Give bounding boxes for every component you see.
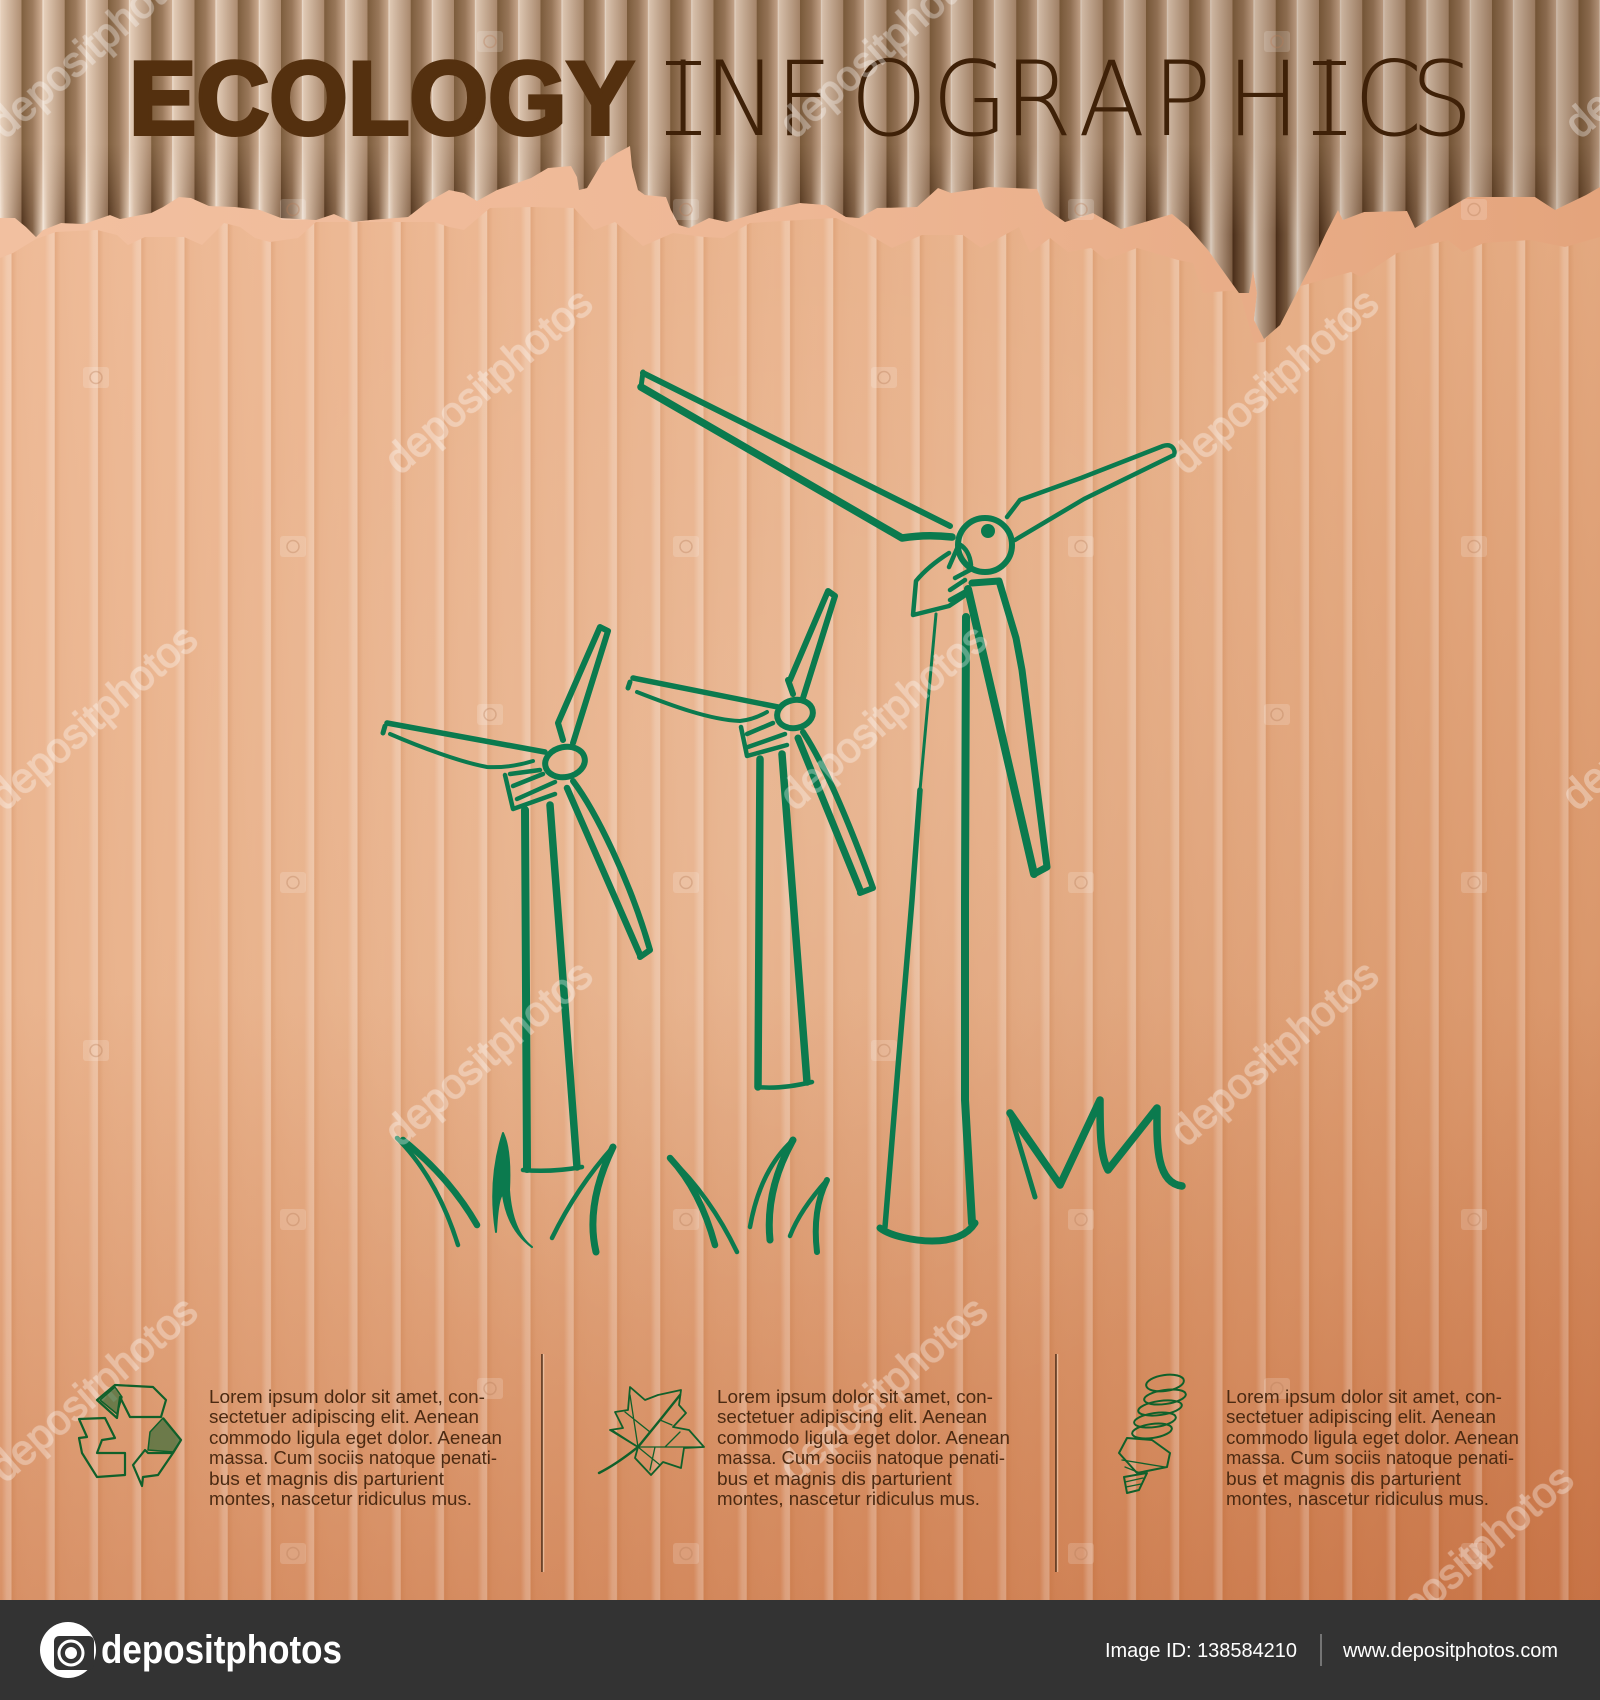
text block: column 1: Lorem ipsum dolor sit amet, con-: [209, 1386, 485, 1407]
exposed corrugated strip: [0, 0, 1600, 345]
text block: column 2: commodo ligula eget dolor. Aenean: [717, 1427, 1010, 1448]
watermark text: depositphotos: [1161, 278, 1387, 483]
image id: Image ID: 138584210: [1105, 1640, 1297, 1662]
logo wordmark: depositphotos: [101, 1628, 342, 1672]
torn paper flap: [0, 0, 1600, 343]
wind turbines illustration: [383, 372, 1182, 1252]
text block: column 1: [209, 1386, 502, 1509]
text block: column 2: sectetuer adipiscing elit. Aenean: [717, 1406, 987, 1427]
watermark text: depositphotos: [770, 1286, 996, 1491]
text block: column 3: bus et magnis dis parturient: [1226, 1468, 1461, 1489]
watermark text: depositphotos: [375, 950, 601, 1155]
text block: column 1: bus et magnis dis parturient: [209, 1468, 444, 1489]
footer separator: [1320, 1634, 1322, 1666]
column divider: [1056, 1354, 1058, 1572]
logo icon: camera: [40, 1622, 96, 1678]
middle turbine: [628, 591, 873, 1088]
footer bar: [0, 1600, 1600, 1700]
icon: maple leaf: [599, 1387, 704, 1475]
text block: column 1: massa. Cum sociis natoque penati-: [209, 1447, 497, 1468]
text block: column 2: bus et magnis dis parturient: [717, 1468, 952, 1489]
text block: column 3: [1226, 1386, 1519, 1509]
text block: column 1: commodo ligula eget dolor. Aenean: [209, 1427, 502, 1448]
text block: column 1: montes, nascetur ridiculus mus.: [209, 1488, 472, 1509]
large turbine: [641, 372, 1175, 1241]
text block: column 1: sectetuer adipiscing elit. Aenean: [209, 1406, 479, 1427]
grass tufts: [397, 1100, 1182, 1252]
watermark text: depositphotos: [1356, 1454, 1582, 1659]
watermark text: depositphotos: [375, 278, 601, 483]
text block: column 2: [717, 1386, 1010, 1509]
column divider: [542, 1354, 544, 1572]
text block: column 3: commodo ligula eget dolor. Aenean: [1226, 1427, 1519, 1448]
small camera watermarks: [83, 31, 1487, 1564]
text block: column 3: sectetuer adipiscing elit. Aenean: [1226, 1406, 1496, 1427]
text block: column 3: massa. Cum sociis natoque penati-: [1226, 1447, 1514, 1468]
text block: column 2: Lorem ipsum dolor sit amet, con-: [717, 1386, 993, 1407]
watermark text: depositphotos: [770, 614, 996, 819]
watermark text: depositphotos: [1161, 950, 1387, 1155]
text block: column 3: montes, nascetur ridiculus mus.: [1226, 1488, 1489, 1509]
icon: recycle: [79, 1385, 181, 1486]
title word: ecology: ECOLOGY: [129, 41, 634, 157]
left turbine: [383, 627, 650, 1171]
website: www.depositphotos.com: [1342, 1640, 1558, 1662]
title: [129, 40, 1473, 160]
text block: column 2: montes, nascetur ridiculus mus.: [717, 1488, 980, 1509]
title word: infographics: INFOGRAPHICS: [669, 40, 1473, 160]
text block: column 3: Lorem ipsum dolor sit amet, con-: [1226, 1386, 1502, 1407]
icon: light bulb: [1119, 1372, 1187, 1493]
text block: column 2: massa. Cum sociis natoque penati-: [717, 1447, 1005, 1468]
